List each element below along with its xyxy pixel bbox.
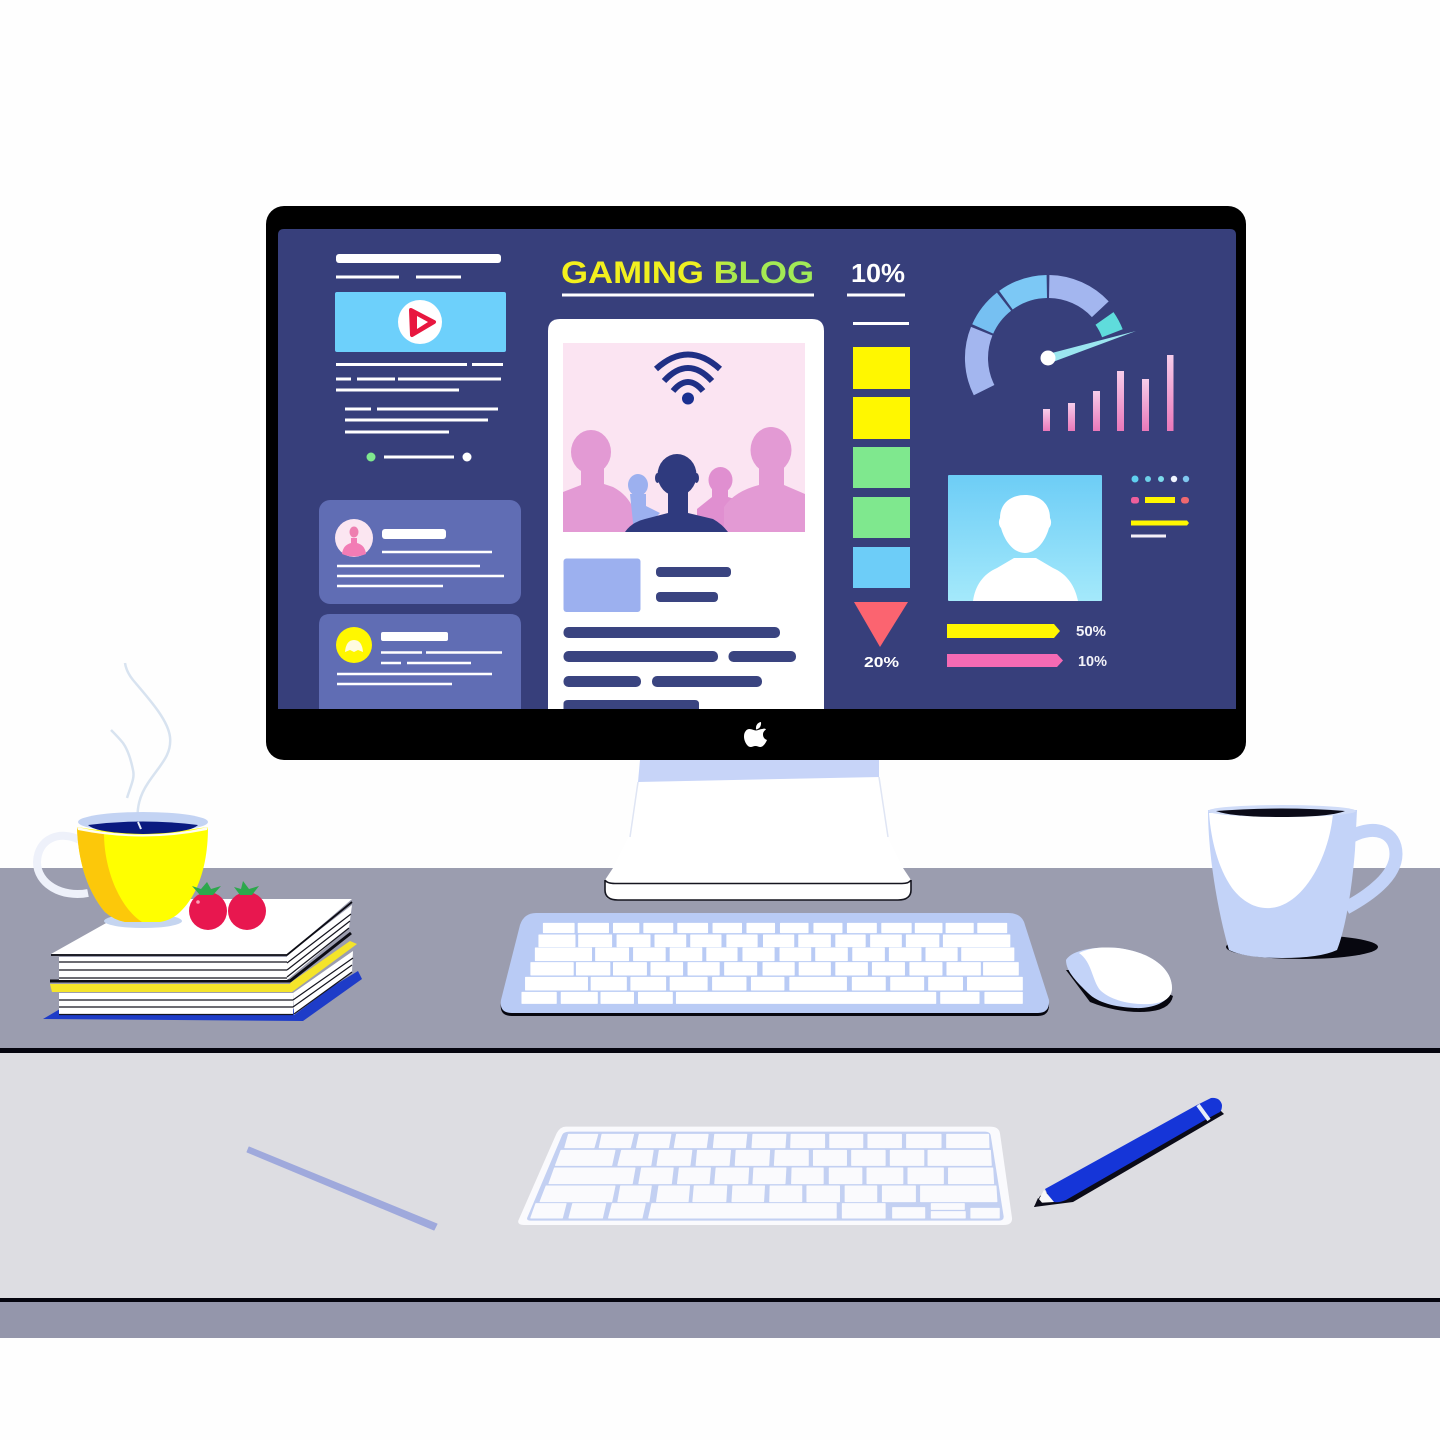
keyboard on desk bbox=[501, 913, 1049, 1016]
avatar: yellow bbox=[336, 627, 372, 663]
lower keyboard bbox=[518, 1127, 1012, 1225]
mouse bbox=[1066, 948, 1173, 1012]
pale pen on desk bbox=[247, 1147, 437, 1230]
monitor stand bbox=[605, 760, 911, 900]
mug shadow bbox=[1226, 935, 1378, 959]
bar chart bbox=[1043, 355, 1174, 431]
bottom pages bbox=[59, 951, 353, 1015]
pencil tip bbox=[1037, 1190, 1054, 1203]
books bbox=[43, 899, 362, 1021]
white mug bbox=[1208, 805, 1396, 959]
mug side shading bbox=[77, 827, 142, 922]
mug body bbox=[1208, 810, 1357, 958]
article image bbox=[563, 343, 805, 532]
desk bbox=[0, 868, 1440, 1338]
percentage bars: 50% bbox=[1076, 624, 1106, 640]
pencil body bbox=[1045, 1098, 1222, 1202]
audience silhouettes bbox=[563, 427, 805, 532]
keys bbox=[522, 923, 1022, 1003]
heading: gaming blog: GAMING BLOG bbox=[561, 254, 814, 290]
icon: apple logo bbox=[744, 722, 767, 747]
article panel: text and video bbox=[335, 254, 506, 462]
coffee bbox=[88, 822, 198, 834]
upper pages bbox=[59, 905, 352, 980]
bottom blue cover bbox=[43, 971, 362, 1021]
blue pencil bbox=[1034, 1098, 1224, 1207]
mug rim bbox=[78, 812, 208, 832]
colour block column bbox=[847, 258, 910, 671]
mug highlight bbox=[1209, 813, 1333, 908]
mug handle bbox=[1346, 830, 1396, 908]
colour block column: 20% bbox=[864, 654, 899, 671]
small legend bbox=[1131, 476, 1189, 538]
gauge needle bbox=[1040, 331, 1136, 366]
gauge bbox=[965, 275, 1136, 395]
central article card bbox=[548, 319, 824, 709]
mug handle bbox=[37, 836, 88, 894]
saucer bbox=[104, 914, 182, 928]
monitor screen bbox=[278, 229, 1236, 709]
icon: wifi bbox=[656, 354, 720, 404]
tomatoes bbox=[189, 881, 266, 930]
percentage bars bbox=[947, 624, 1107, 670]
pencil shadow bbox=[1034, 1108, 1224, 1207]
steam bbox=[111, 663, 170, 827]
lower keyboard keys bbox=[531, 1134, 999, 1218]
mug body bbox=[77, 827, 208, 922]
monitor bbox=[266, 206, 1246, 760]
comment card 1 bbox=[319, 500, 521, 604]
avatar: pink user bbox=[335, 519, 373, 557]
colour block column: 10% bbox=[851, 258, 905, 288]
top cover bbox=[51, 899, 352, 955]
coffee bbox=[1208, 805, 1356, 817]
pencil band bbox=[1198, 1105, 1209, 1120]
yellow mug bbox=[37, 812, 208, 928]
yellow cover bbox=[50, 984, 292, 992]
video player bbox=[335, 292, 506, 352]
comment card 2 bbox=[319, 614, 521, 709]
percentage bars: 10% bbox=[1078, 654, 1107, 670]
monitor bezel bbox=[266, 206, 1246, 760]
middle cover line bbox=[50, 933, 351, 981]
profile picture bbox=[948, 475, 1102, 601]
